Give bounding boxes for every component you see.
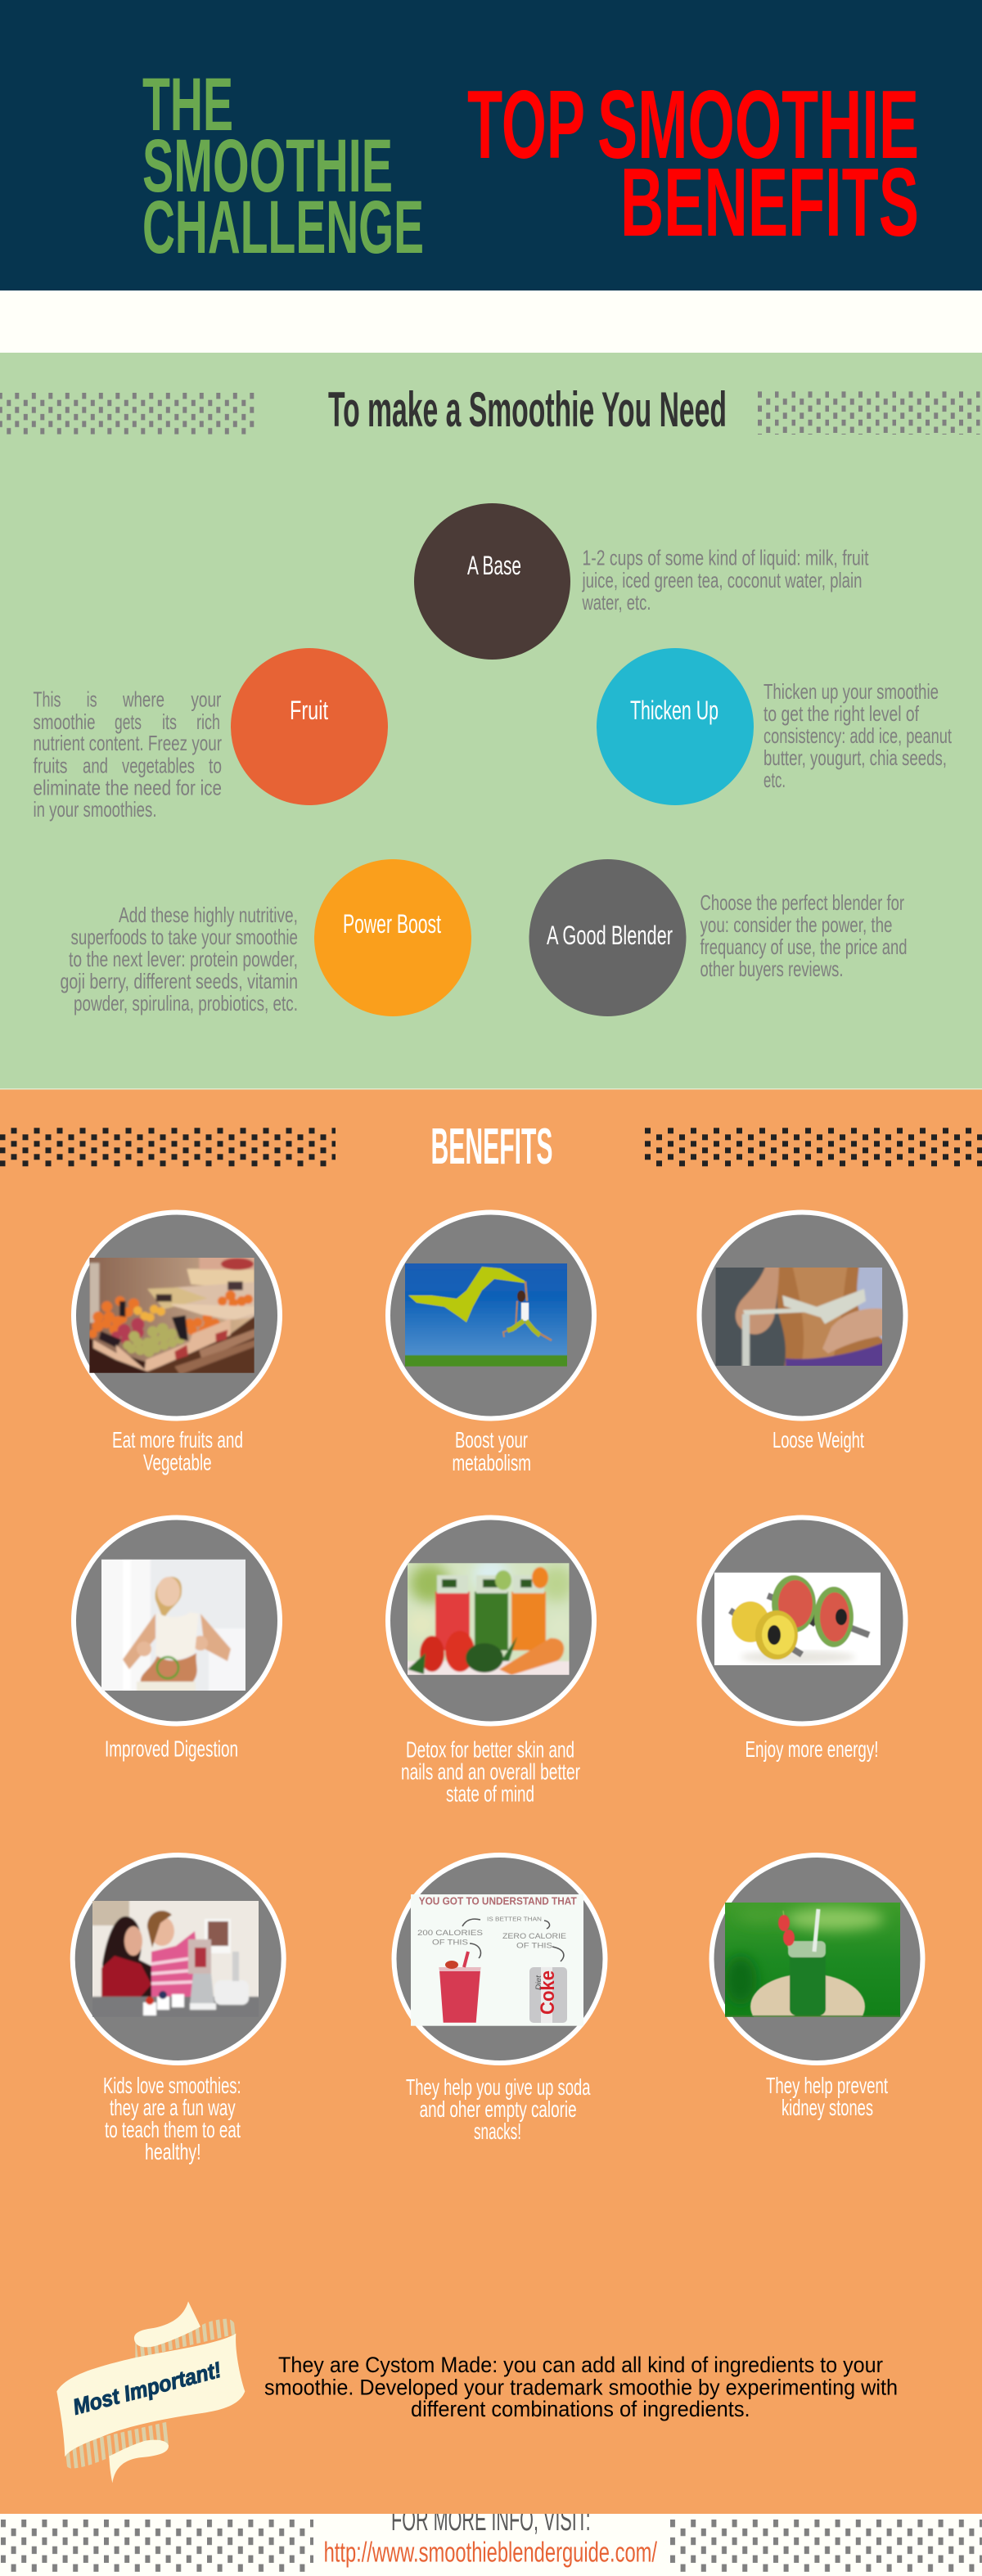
text block: custom made: smoothie. Developed your trademark smoothie by experimenting with: [264, 2376, 898, 2400]
panel: footer: [0, 2514, 982, 2576]
label: They help you give up soda: [406, 2074, 591, 2100]
benefit: boost metabolism: [388, 1213, 594, 1475]
label: [452, 1427, 531, 1475]
photo: fruit dumbbells: [711, 1569, 884, 1669]
ingredient: Power Boost: Add these highly nutritive,: [119, 903, 298, 927]
label: and oher empty calorie: [420, 2096, 577, 2122]
text block: custom made: different combinations of ingredients.: [411, 2397, 750, 2421]
label: Enjoy more energy!: [745, 1736, 879, 1762]
label: Eat more fruits and: [112, 1427, 243, 1452]
ingredient: A Good Blender: A Good Blender: [547, 921, 673, 950]
label: [766, 2073, 888, 2120]
photo: mother and child with blender: [89, 1898, 262, 2020]
ingredient: A Good Blender: Choose the perfect blender for: [700, 890, 904, 915]
photo: woman showing stomach: [98, 1556, 249, 1694]
label: metabolism: [452, 1450, 531, 1475]
photo: market stall: [88, 1256, 256, 1375]
benefit: loose weight: [699, 1213, 905, 1452]
photo: waist and tape measure: [715, 1268, 882, 1366]
white band: [0, 290, 982, 353]
label: [401, 1737, 580, 1807]
ingredient: Fruit: its: [162, 709, 177, 734]
ingredient: Power Boost: Power Boost: [343, 909, 441, 939]
ingredient: Fruit: smoothie: [33, 709, 95, 734]
ingredient: A Good Blender: you: consider the power, the: [700, 912, 892, 937]
photo: smoothie vs diet coke: IS BETTER THAN: [487, 1917, 542, 1923]
benefit: give up soda: [394, 1855, 606, 2144]
label: [406, 2074, 591, 2144]
label: Loose Weight: [773, 1427, 864, 1452]
photo: smoothie vs diet coke: OF THIS: [432, 1939, 468, 1947]
benefit: fruits and vegetable: [74, 1213, 280, 1475]
dash pattern right: [645, 1128, 982, 1167]
ingredient: Thicken Up: etc.: [764, 768, 786, 792]
ingredient: Fruit: and: [83, 753, 108, 777]
dash pattern left: [0, 2520, 313, 2572]
title: The Smoothie Challenge: SMOOTHIE: [142, 124, 393, 208]
photo: smoothie vs diet coke: Coke: [537, 1970, 559, 2015]
ingredient: Thicken Up: [597, 648, 953, 805]
ingredient: A Base: A Base: [467, 551, 521, 580]
ingredient: Fruit: gets: [115, 709, 142, 734]
label: to teach them to eat: [105, 2117, 241, 2142]
label: Boost your: [455, 1427, 528, 1452]
ribbon: Most Important: [56, 2301, 245, 2483]
ingredient: A Good Blender: [529, 859, 907, 1016]
label: healthy!: [145, 2139, 201, 2164]
title: The Smoothie Challenge: [142, 63, 424, 269]
benefit: improved digestion: [74, 1517, 280, 1762]
ingredient: Fruit: rich: [196, 709, 220, 734]
photo: smoothie vs diet coke: [411, 1894, 583, 2026]
ingredient: Fruit: This: [33, 687, 61, 712]
ingredient: Fruit: nutrient content. Freez your: [33, 731, 222, 755]
ingredient: A Good Blender: other buyers reviews.: [700, 957, 843, 981]
ingredient: Fruit: eliminate the need for ice: [33, 776, 222, 800]
dot pattern left: [0, 393, 255, 435]
ingredient: Fruit: vegetables: [122, 753, 195, 777]
label: kidney stones: [782, 2095, 873, 2120]
title: Top Smoothie Benefits: [467, 70, 919, 257]
text block: custom made: [264, 2353, 898, 2421]
benefit: more energy: [699, 1517, 905, 1762]
panel: benefits: [0, 1088, 982, 2514]
label: Improved Digestion: [105, 1736, 238, 1762]
text: for more info: FOR MORE INFO, VISIT:: [391, 2503, 591, 2538]
label: state of mind: [446, 1781, 534, 1807]
title: The Smoothie Challenge: THE: [142, 63, 233, 146]
ingredient: Power Boost: goji berry, different seeds, vitamin: [61, 969, 298, 993]
label: Detox for better skin and: [406, 1737, 574, 1763]
panel: benefits: BENEFITS: [430, 1119, 553, 1175]
photo: smoothie vs diet coke: Diet: [534, 1975, 543, 1990]
label: they are a fun way: [110, 2095, 236, 2120]
title: The Smoothie Challenge: CHALLENGE: [142, 186, 424, 269]
ingredient: Fruit: Fruit: [290, 696, 328, 725]
ingredient: Power Boost: powder, spirulina, probiotics, etc.: [74, 991, 298, 1016]
photo: smoothie vs diet coke: OF THIS: [516, 1942, 552, 1950]
panel: to make a smoothie: [0, 353, 982, 1088]
label: snacks!: [474, 2119, 521, 2144]
benefit: kids love smoothies: [73, 1855, 284, 2164]
ingredient: Thicken Up: Thicken Up: [630, 696, 718, 725]
ingredient: A Base: 1-2 cups of some kind of liquid: milk, fruit: [583, 545, 869, 570]
photo: smoothie vs diet coke: 200 CALORIES: [417, 1929, 483, 1937]
label: Vegetable: [143, 1450, 212, 1475]
photo: vegetable juices: [408, 1563, 570, 1675]
label: They help prevent: [766, 2073, 888, 2098]
ingredient: Fruit: in your smoothies.: [33, 797, 157, 822]
title: Top Smoothie Benefits: TOP: [467, 70, 585, 179]
ingredient: Power Boost: to the next lever: protein powder,: [69, 947, 298, 971]
ingredient: Fruit: fruits: [33, 753, 67, 777]
label: [103, 2073, 241, 2164]
photo: smoothie vs diet coke: ZERO CALORIE: [502, 1932, 566, 1940]
label: Kids love smoothies:: [103, 2073, 241, 2098]
ingredient: Fruit: where: [122, 687, 164, 712]
ingredient: Power Boost: superfoods to take your smoothie: [70, 925, 298, 949]
ingredient: A Base: water, etc.: [582, 590, 651, 615]
photo: green smoothie jar on grass: [725, 1903, 900, 2017]
ingredient: A Base: [414, 503, 869, 660]
ingredient: Thicken Up: to get the right level of: [764, 701, 920, 726]
ingredient: Fruit: your: [191, 687, 222, 712]
label: nails and an overall better: [401, 1759, 580, 1785]
text block: custom made: They are Cystom Made: you can add all kind of ingredients to your: [278, 2353, 883, 2377]
benefit: kidney stones: [712, 1855, 923, 2120]
ingredient: A Base: juice, iced green tea, coconut water, plain: [582, 568, 863, 592]
ingredient: Fruit: is: [87, 687, 97, 712]
label: [112, 1427, 243, 1475]
ingredient: Fruit: to: [209, 753, 222, 777]
ingredient: Fruit: [33, 648, 388, 822]
benefit: detox: [388, 1517, 594, 1807]
photo: smoothie vs diet coke: YOU GOT TO UNDERSTAND THAT: [419, 1895, 577, 1907]
dot pattern right: [758, 391, 982, 435]
link: website URL: http://www.smoothieblenderguide.com/: [324, 2538, 657, 2569]
ingredient: Power Boost: [61, 859, 471, 1016]
panel: page header: [0, 0, 982, 290]
ribbon: Most Important: Most Important!: [70, 2358, 224, 2420]
photo: jumping woman with scarf: [405, 1263, 567, 1367]
dash pattern left: [0, 1128, 336, 1167]
dash pattern right: [670, 2520, 982, 2572]
